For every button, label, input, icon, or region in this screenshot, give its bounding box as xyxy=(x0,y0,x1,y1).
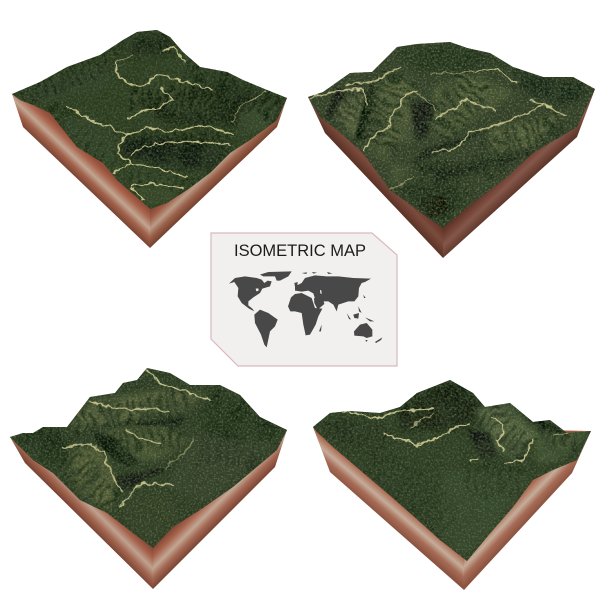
soil right face xyxy=(443,89,595,258)
terrain surface xyxy=(0,360,300,560)
americas xyxy=(229,271,292,347)
terrain surface xyxy=(313,380,591,561)
soil right face xyxy=(153,410,287,589)
soil left face xyxy=(12,90,150,248)
roads xyxy=(62,370,210,507)
terrain surface xyxy=(0,20,300,220)
soil right face xyxy=(464,430,591,590)
mottled texture xyxy=(313,380,570,550)
mottled texture xyxy=(22,30,287,194)
title: ISOMETRIC MAP xyxy=(234,241,366,260)
card panel xyxy=(211,233,397,366)
soil left face xyxy=(10,437,153,589)
roads xyxy=(67,47,267,200)
soil right face xyxy=(150,90,287,248)
terrain surface xyxy=(308,42,595,228)
infographic card: isometric map xyxy=(211,233,397,366)
africa, eurasia, oceania xyxy=(288,272,382,343)
mottled texture xyxy=(10,373,287,536)
roads xyxy=(343,408,567,463)
world map xyxy=(229,271,382,347)
mottled texture xyxy=(311,42,595,218)
terrain block: top right xyxy=(300,30,600,258)
terrain block: bottom left xyxy=(0,360,300,589)
roads xyxy=(310,67,567,190)
soil left face xyxy=(308,90,443,258)
terrain block: bottom right xyxy=(300,370,600,590)
soil left face xyxy=(313,425,464,590)
terrain block: top left xyxy=(0,20,300,248)
